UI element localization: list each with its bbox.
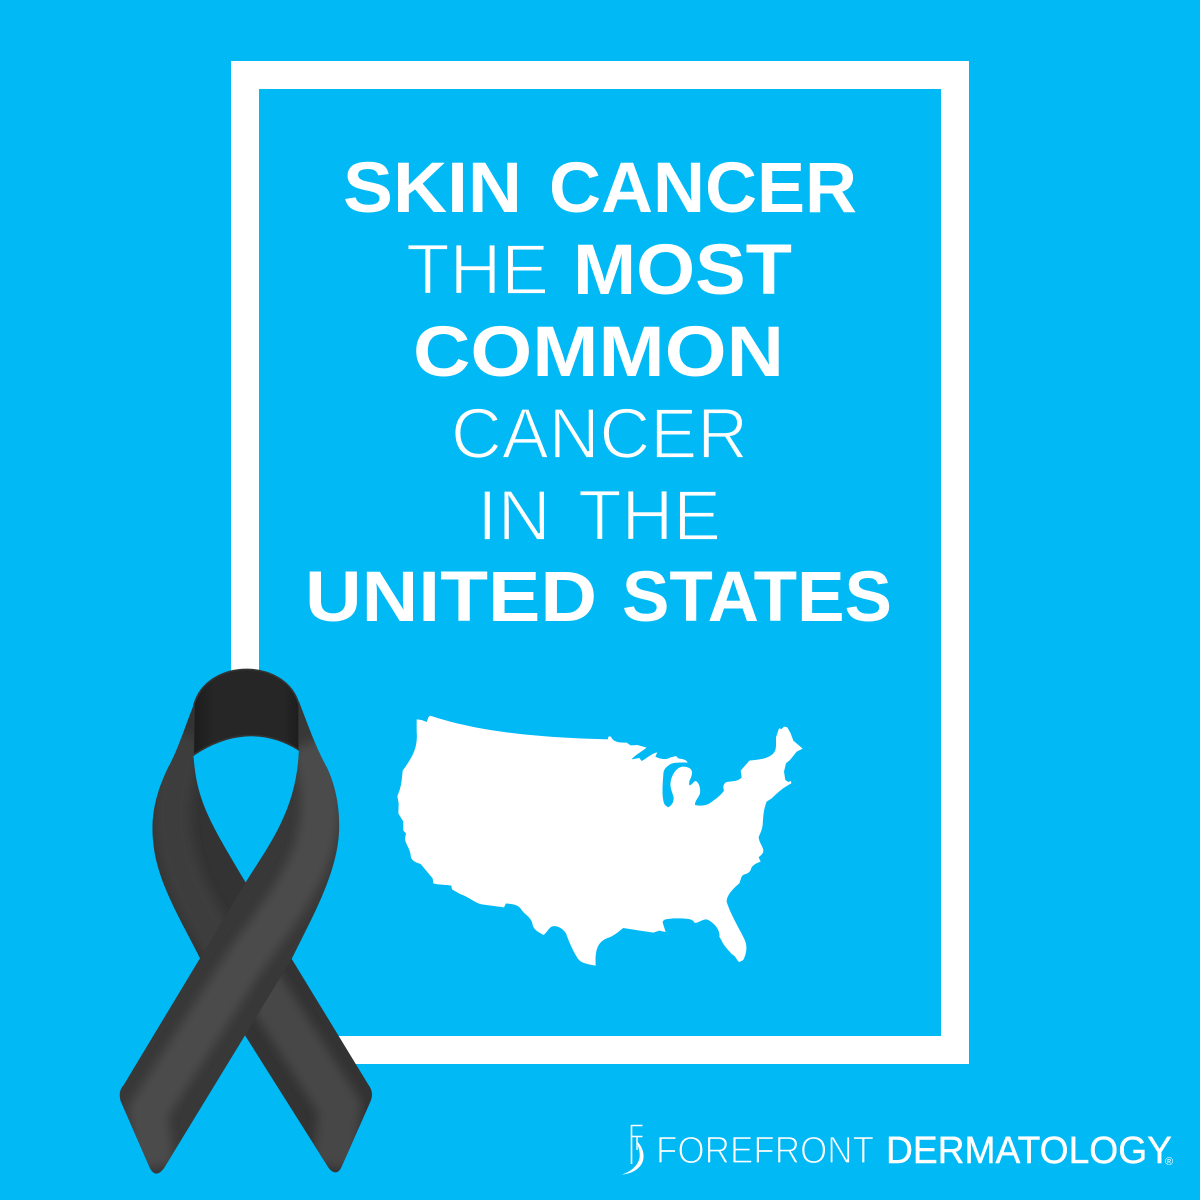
title: MOST bbox=[573, 231, 792, 310]
title: CANCER bbox=[451, 395, 748, 474]
logo: Forefront Dermatology bbox=[622, 1125, 1173, 1174]
title: UNITED bbox=[305, 558, 597, 637]
logo: Forefront Dermatology: DERMATOLOGY bbox=[886, 1130, 1172, 1172]
white frame bbox=[231, 61, 969, 1064]
icon: black awareness ribbon bbox=[120, 669, 372, 1174]
ribbon back strand bbox=[152, 702, 372, 1172]
title: THE bbox=[406, 231, 549, 310]
title: STATES bbox=[622, 558, 892, 637]
title: CANCER bbox=[549, 149, 857, 228]
title: THE bbox=[578, 477, 721, 556]
title: SKIN bbox=[343, 149, 522, 228]
title bbox=[305, 149, 892, 637]
logo wordmark: FOREFRONT bbox=[656, 1130, 874, 1172]
title: IN bbox=[477, 477, 551, 556]
logo: Forefront Dermatology: ® bbox=[1165, 1156, 1173, 1168]
icon: FS monogram bbox=[622, 1125, 644, 1174]
icon: map of the United States bbox=[397, 716, 803, 966]
title: COMMON bbox=[413, 313, 784, 392]
ribbon front strand bbox=[120, 702, 339, 1174]
ribbon loop inner band bbox=[193, 669, 299, 755]
